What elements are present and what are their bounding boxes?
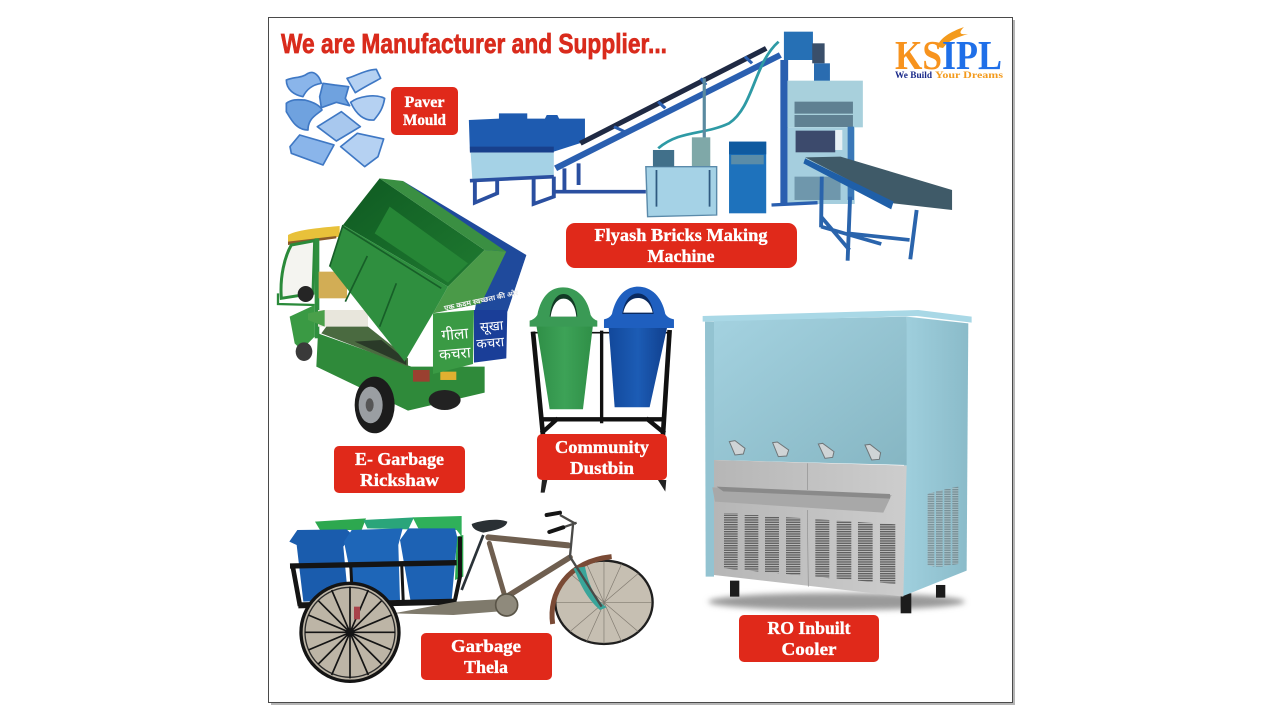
panel: community dustbin (530, 287, 674, 493)
label: Community Dustbin: Dustbin (570, 458, 634, 478)
seat (472, 520, 507, 533)
hoses (658, 42, 779, 148)
rear wheel (301, 583, 399, 681)
label: Flyash Bricks Making Machine: Machine (648, 246, 715, 266)
label: Garbage Thela (421, 633, 552, 680)
text: gila kachra: कचरा (438, 344, 473, 367)
label: Flyash Bricks Making Machine: Flyash Bricks Making (594, 225, 768, 245)
text: sukha kachra: सूखा (479, 319, 505, 338)
bicycle frame (488, 537, 570, 597)
back panels (433, 310, 474, 374)
icon: dustbins on stand (530, 287, 674, 493)
label: Paver Mould: Mould (403, 112, 446, 129)
label: E- Garbage Rickshaw: Rickshaw (360, 470, 439, 490)
logo: KSIPL: We Build (895, 71, 933, 81)
panel: RO inbuilt cooler (703, 310, 972, 662)
front panel (330, 225, 448, 362)
page frame (268, 18, 1015, 705)
logo: KSIPL: Your Dreams (935, 71, 1003, 81)
label: Community Dustbin (537, 434, 667, 480)
body (316, 333, 485, 411)
title: We are Manufacturer and Supplier... (281, 28, 667, 59)
label: Paver Mould: Paver (404, 94, 445, 111)
cab (288, 226, 340, 244)
blue bin (609, 327, 667, 407)
icon: water cooler (703, 310, 972, 613)
icon: garbage tricycle (289, 513, 653, 681)
icon: brick machine (469, 32, 952, 261)
panel: e-garbage rickshaw (278, 178, 526, 493)
panel: paver mould (286, 69, 458, 167)
hopper (469, 113, 585, 152)
label: Garbage Thela: Garbage (451, 636, 521, 656)
hydraulic unit (692, 137, 710, 167)
label: Community Dustbin: Community (555, 437, 649, 457)
output conveyor (805, 157, 952, 210)
text: strip: एक कदम स्वच्छता की ओर (443, 288, 520, 314)
label: E- Garbage Rickshaw: E- Garbage (355, 449, 444, 469)
icon: paver moulds (286, 69, 385, 167)
blue buckets (289, 529, 352, 602)
control panel (729, 142, 766, 213)
fork (573, 567, 607, 610)
label: Paver Mould (391, 87, 458, 135)
label: RO Inbuilt Cooler: RO Inbuilt (768, 618, 850, 638)
label: RO Inbuilt Cooler: Cooler (782, 639, 837, 659)
green bin (536, 325, 593, 409)
lip (380, 178, 506, 252)
label: Garbage Thela: Thela (464, 657, 508, 677)
inclined conveyor (580, 48, 766, 143)
rear green buckets (315, 518, 366, 530)
press (780, 60, 788, 203)
text: sukha kachra: कचरा (476, 335, 505, 354)
blue side (403, 181, 526, 312)
label: Flyash Bricks Making Machine (566, 223, 797, 268)
label: E- Garbage Rickshaw (334, 446, 465, 493)
text: sukha kachra (476, 319, 505, 354)
label: RO Inbuilt Cooler (739, 615, 879, 662)
icon: e-garbage rickshaw (278, 178, 526, 433)
text: gila kachra: गीला (441, 324, 470, 347)
text: gila kachra (438, 324, 473, 367)
logo: KSIPL: KS (895, 32, 942, 78)
interior (343, 178, 485, 287)
logo: KSIPL: IPL (942, 32, 1002, 78)
logo: KSIPL (895, 27, 1003, 81)
handlebar (560, 515, 602, 607)
wheels (429, 390, 461, 410)
panel: flyash bricks making machine (469, 32, 952, 268)
frame (290, 535, 483, 606)
panel: garbage thela (289, 513, 653, 681)
front wheel (555, 561, 653, 644)
